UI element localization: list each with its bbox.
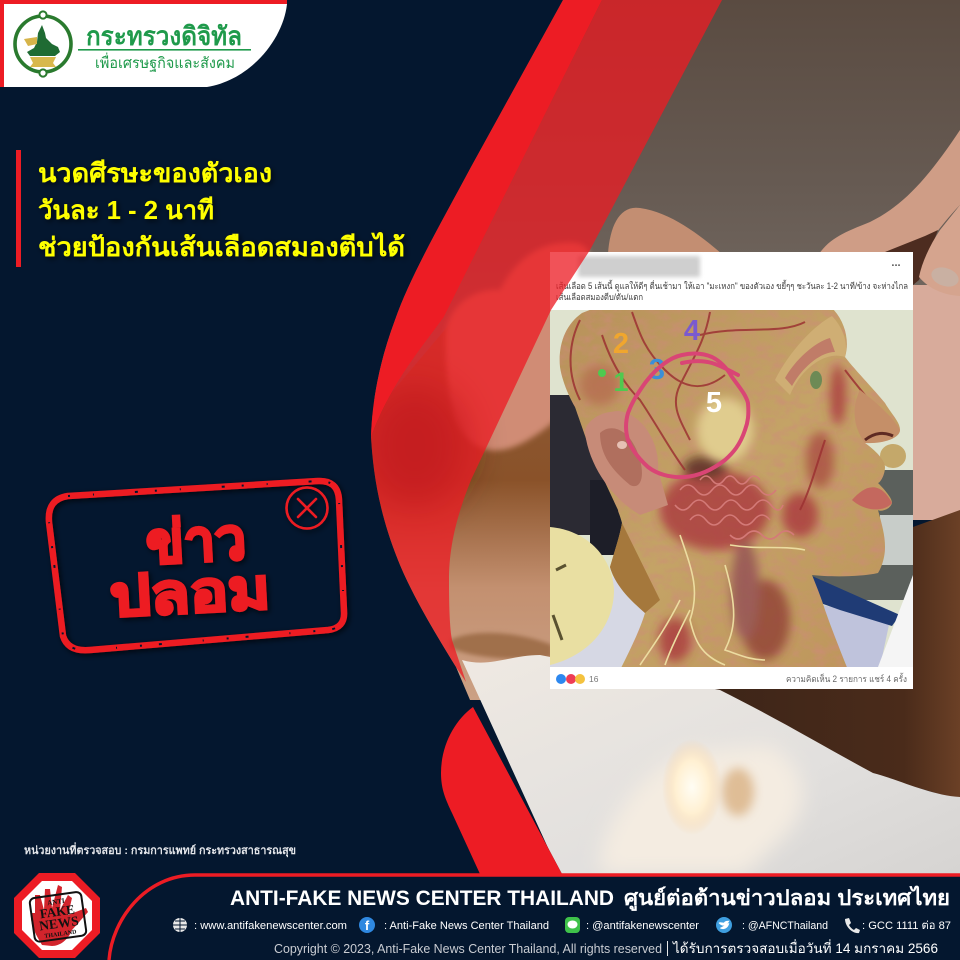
footer title english: ANTI-FAKE NEWS CENTER THAILAND bbox=[230, 887, 614, 910]
post photo: dissected head bbox=[550, 306, 913, 670]
photo: face skin bbox=[371, 332, 550, 700]
black sign bbox=[29, 891, 87, 942]
word fake: FAKE bbox=[39, 902, 76, 921]
globe lines bbox=[173, 918, 187, 932]
photo: white towel bbox=[462, 655, 960, 874]
circle bbox=[286, 488, 328, 528]
phone number: : GCC 1111 ต่อ 87 bbox=[862, 920, 951, 932]
line square bbox=[565, 917, 580, 933]
emblem top knot bbox=[39, 11, 47, 19]
vein 6 bbox=[845, 370, 880, 415]
lower red curve shape bbox=[441, 707, 562, 874]
icon: twitter bbox=[716, 917, 732, 933]
veins bbox=[571, 312, 880, 510]
word news: NEWS bbox=[38, 913, 80, 933]
ear bbox=[585, 411, 668, 515]
word anti: ANTI bbox=[47, 897, 65, 907]
white triangle bbox=[878, 575, 913, 667]
photo: right-side skin bbox=[913, 285, 960, 520]
gold scroll bbox=[24, 37, 37, 46]
lips bbox=[852, 487, 892, 509]
circle stroke bbox=[626, 354, 748, 477]
panel white bbox=[4, 4, 287, 87]
neck shade bbox=[610, 523, 660, 613]
ministry name: กระทรวงดิจิทัล bbox=[86, 21, 242, 51]
chin vein bbox=[782, 493, 818, 537]
pale nerves bbox=[640, 535, 805, 665]
octagon red bbox=[14, 873, 100, 958]
line id: : @antifakenewscenter bbox=[586, 920, 699, 932]
headline line 3: ช่วยป้องกันเส้นเลือดสมองตีบได้ bbox=[38, 231, 405, 262]
wow bbox=[575, 674, 585, 684]
background photo: spa massage bbox=[360, 0, 960, 874]
gold base bbox=[30, 57, 56, 67]
octagon white bbox=[22, 881, 92, 950]
lavender table bbox=[824, 605, 889, 667]
reactions icons bbox=[556, 674, 585, 684]
temple bbox=[580, 365, 620, 405]
photo: wall bbox=[360, 0, 960, 400]
cheek bbox=[806, 432, 834, 488]
emblem bbox=[15, 11, 71, 77]
vein 3 bbox=[676, 312, 710, 440]
throat bbox=[740, 580, 790, 660]
nose side bbox=[830, 365, 846, 425]
eye socket flap bbox=[775, 316, 846, 395]
emblem ring bbox=[15, 16, 71, 72]
line bubble bbox=[568, 920, 578, 928]
eye bbox=[810, 371, 822, 389]
green rule bbox=[78, 49, 251, 51]
photo: ear shape bbox=[446, 242, 590, 450]
photo: eyelash line bbox=[450, 633, 552, 659]
card background bbox=[550, 252, 913, 689]
table grey-white bbox=[550, 577, 645, 667]
grey background right bbox=[812, 470, 913, 600]
pink hand-drawn circle bbox=[626, 354, 748, 477]
photo: hair bbox=[715, 510, 960, 797]
bowl stains bbox=[553, 565, 566, 640]
photo: fingernail bbox=[932, 268, 958, 286]
jaw dark bbox=[683, 456, 727, 480]
translucent red band bbox=[371, 0, 722, 682]
red accent bar bbox=[16, 150, 21, 267]
icon: line bbox=[565, 917, 580, 933]
photo: candle wax pool bbox=[722, 768, 754, 816]
emblem bottom knot bbox=[39, 69, 47, 77]
post text line 1: เส้นเลือด 5 เส้นนี้ ดูแลให้ดีๆ ตื่นเช้ามา ให้เอา "มะเหงก" ของตัวเอง ขยี้ๆๆ ชะวันละ 1-2 นาที/ข้าง จะห่างไกล bbox=[556, 279, 908, 292]
photo: finger bbox=[919, 205, 960, 296]
headline bbox=[38, 158, 405, 262]
stamp word: plom: ปลอม bbox=[108, 557, 272, 628]
vessel 4 bbox=[700, 476, 760, 484]
lower neck bbox=[659, 618, 691, 662]
photo: nose bbox=[608, 208, 722, 254]
copyright: Copyright © 2023, Anti-Fake News Center Thailand, All rights reserved bbox=[274, 942, 662, 956]
nostril bbox=[865, 433, 893, 440]
dark room left bbox=[550, 395, 604, 535]
head and neck bbox=[560, 306, 900, 670]
blue cloth bbox=[812, 576, 900, 626]
reaction count: 16 bbox=[589, 674, 599, 684]
neck vein mass bbox=[660, 470, 770, 550]
vein 5 bbox=[571, 320, 580, 400]
headline line 2: วันละ 1 - 2 นาที bbox=[38, 195, 214, 225]
fb disc bbox=[359, 917, 375, 933]
facebook name: : Anti-Fake News Center Thailand bbox=[384, 920, 549, 932]
word thailand: THAILAND bbox=[44, 929, 78, 940]
panel red edge bbox=[0, 0, 287, 87]
more dots: ... bbox=[891, 257, 901, 269]
ear inner bbox=[600, 428, 642, 486]
sign frame bbox=[29, 891, 87, 942]
twitter id: : @AFNCThailand bbox=[742, 920, 828, 932]
fake news stamp bbox=[49, 481, 344, 650]
nose front bbox=[855, 390, 900, 443]
number 5: 5 bbox=[706, 387, 722, 419]
light patch right bbox=[880, 515, 913, 565]
red vein patches bbox=[580, 365, 846, 662]
footer red curve bbox=[109, 875, 960, 960]
stamp worn texture bbox=[49, 481, 344, 650]
chair dots bbox=[590, 480, 622, 555]
icon: globe bbox=[173, 918, 187, 932]
deity figure bbox=[27, 25, 60, 56]
cross bbox=[298, 499, 316, 517]
nerve 2 bbox=[725, 565, 765, 660]
photo: candle body bbox=[600, 745, 803, 874]
wall bbox=[550, 310, 913, 667]
fb f: f bbox=[365, 918, 370, 933]
anti-fake news stop logo bbox=[14, 873, 100, 958]
photo: candle flame bbox=[664, 742, 719, 832]
number 2: 2 bbox=[613, 328, 629, 360]
number 3: 3 bbox=[649, 354, 665, 386]
head mottled tissue texture bbox=[560, 306, 900, 670]
navy diagonal panel bbox=[0, 0, 563, 960]
twitter bird bbox=[719, 921, 729, 929]
like bbox=[556, 674, 566, 684]
icon: phone bbox=[845, 918, 860, 933]
post text line 2: เส้นเลือดสมองตีบ/ตัน/แตก bbox=[556, 292, 643, 302]
footer title thai: ศูนย์ต่อต้านข่าวปลอม ประเทศไทย bbox=[624, 885, 950, 912]
nerve 1 bbox=[680, 535, 725, 665]
nerve 5 bbox=[665, 610, 690, 665]
vessel 5 bbox=[730, 531, 794, 539]
squiggly neck vessels bbox=[675, 476, 794, 539]
number 4: 4 bbox=[684, 315, 700, 347]
love bbox=[566, 674, 576, 684]
comment and share count: ความคิดเห็น 2 รายการ แชร์ 4 ครั้ง bbox=[786, 672, 907, 684]
eye socket inner pink bbox=[785, 338, 835, 386]
social post card bbox=[550, 252, 913, 689]
ministry logo panel bbox=[0, 0, 287, 87]
vein 7 bbox=[800, 440, 825, 510]
vessel 3 bbox=[690, 515, 770, 525]
photo: hand bbox=[819, 130, 960, 254]
number 1: 1 bbox=[613, 367, 629, 397]
website: : www.antifakenewscenter.com bbox=[194, 920, 347, 932]
neck centre bbox=[731, 540, 759, 640]
source agency: หน่วยงานที่ตรวจสอบ : กรมการแพทย์ กระทรวงสาธารณสุข bbox=[24, 842, 296, 858]
separator bbox=[667, 941, 668, 956]
cheek light patch bbox=[697, 398, 753, 462]
vein 1 bbox=[602, 335, 685, 470]
photo: shadow below ear bbox=[365, 385, 465, 505]
nerve 3 bbox=[640, 600, 680, 665]
nerve 4 bbox=[730, 545, 805, 550]
small skull bbox=[880, 444, 906, 468]
ear highlight bbox=[617, 441, 627, 449]
vein 4 bbox=[700, 322, 805, 335]
stamp x circle bbox=[286, 488, 328, 528]
globe disc bbox=[173, 918, 187, 932]
green dot bbox=[598, 369, 606, 377]
overdraw stroke bbox=[682, 361, 738, 375]
vein 2 bbox=[632, 312, 725, 386]
stamp word: khao: ข่าว bbox=[144, 506, 248, 577]
vessel 2 bbox=[675, 500, 783, 510]
headline line 1: นวดศีรษะของตัวเอง bbox=[38, 158, 272, 188]
vessel 1 bbox=[680, 485, 776, 495]
solid red band bbox=[371, 0, 602, 437]
stamp border bbox=[49, 481, 344, 650]
verification date: ได้รับการตรวจสอบเมื่อวันที่ 14 มกราคม 2566 bbox=[672, 939, 938, 956]
footer panel bbox=[109, 875, 960, 960]
twitter disc bbox=[716, 917, 732, 933]
ministry subtitle: เพื่อเศรษฐกิจและสังคม bbox=[95, 52, 235, 72]
blurred profile name bbox=[578, 256, 700, 277]
bowl bbox=[550, 527, 614, 665]
red hand bbox=[31, 885, 88, 946]
icon: facebook bbox=[359, 917, 375, 933]
photo: dark gap between fingers bbox=[880, 230, 938, 285]
